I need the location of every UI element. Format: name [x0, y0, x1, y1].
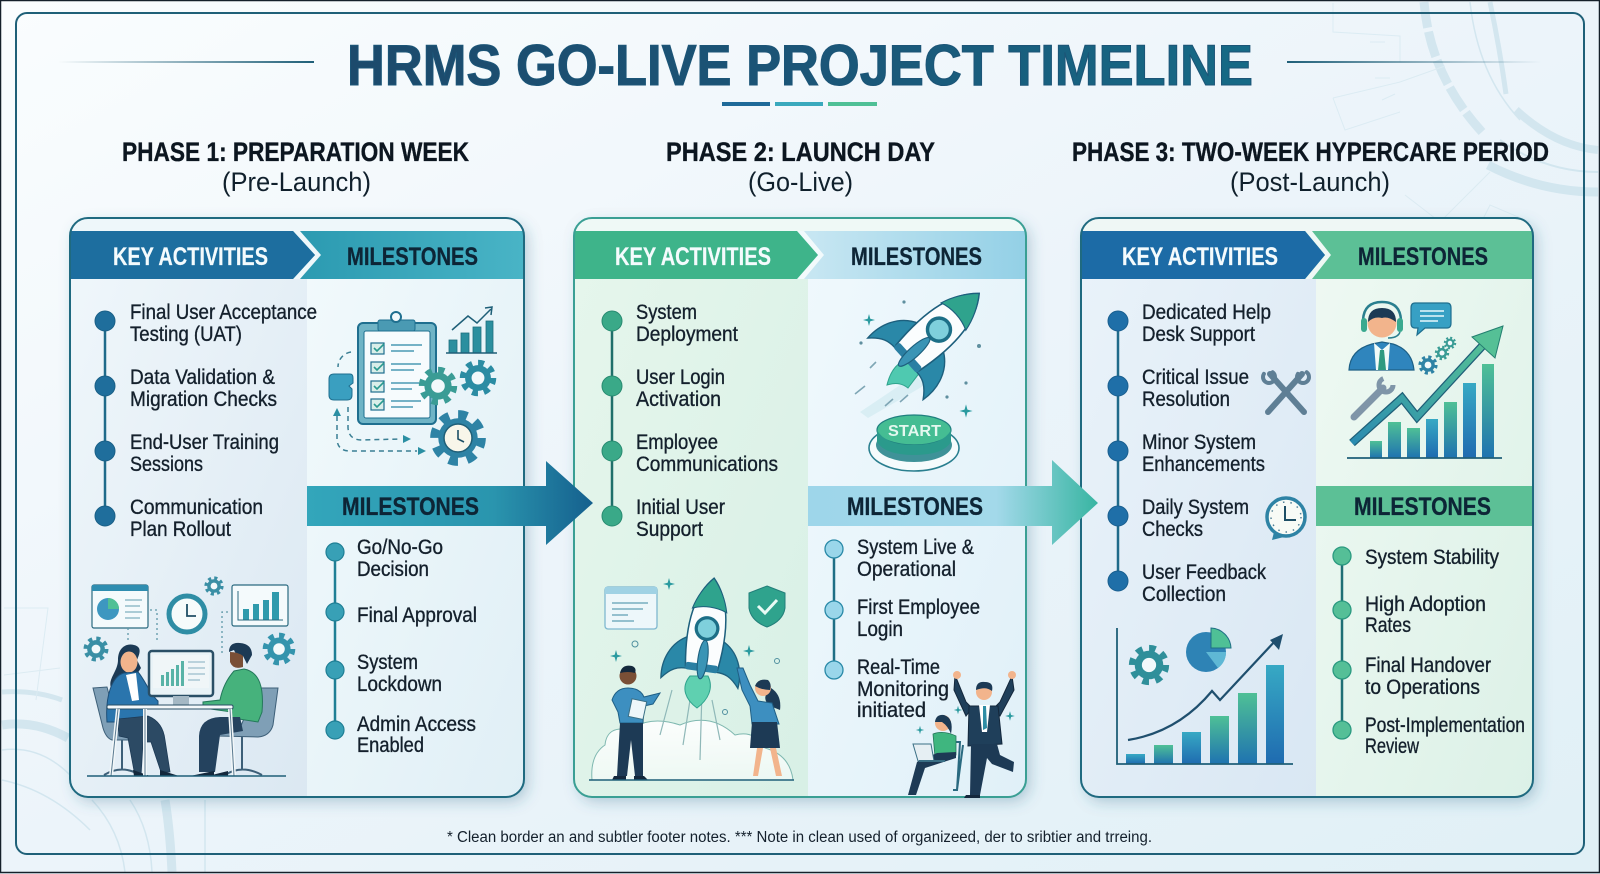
phase 3 activities timeline [1108, 301, 1271, 606]
phase 2 milestones timeline [825, 536, 980, 722]
panel: phase 1 [70, 218, 524, 797]
phase 1 milestones timeline: Lockdown [357, 673, 442, 696]
phase 2 activities timeline: Deployment [636, 323, 738, 346]
phase 2 milestones timeline: Operational [857, 558, 956, 581]
phase 2 heading: PHASE 2: LAUNCH DAY [666, 137, 935, 167]
illustration: team launching rocket [589, 573, 794, 780]
phase 3 milestones timeline: to Operations [1365, 676, 1480, 699]
panel: phase 2 [574, 218, 1026, 798]
icon: rocket launching over start button: START [888, 423, 941, 440]
arrow: phase 2 to phase 3 with milestones band [808, 460, 1098, 545]
title rule left [58, 61, 314, 63]
icon: crossed wrenches [1263, 371, 1309, 412]
phase 3 activities timeline: Checks [1142, 518, 1203, 541]
phase 1 activities timeline [95, 301, 317, 541]
phase 1 milestones timeline: System [357, 651, 418, 674]
phase 2 milestones timeline: First Employee [857, 596, 980, 619]
phase 3 activities timeline: Daily System [1142, 496, 1249, 519]
arrow: phase 2 to phase 3 with milestones band: MILESTONES [847, 493, 983, 521]
phase 1 heading: (Pre-Launch) [222, 167, 371, 197]
phase 3 milestones timeline: Final Handover [1365, 654, 1491, 677]
icon: support agent and growth chart [1347, 302, 1503, 458]
phase 3 milestones timeline: High Adoption [1365, 593, 1486, 616]
title accent bars [722, 102, 877, 106]
phase 3 activities timeline: Collection [1142, 583, 1226, 606]
phase 3 milestones timeline: Review [1365, 735, 1420, 758]
phase 3 activities timeline: Critical Issue [1142, 366, 1249, 389]
phase 3 milestones timeline: Rates [1365, 614, 1411, 637]
phase 2 activities timeline: Initial User [636, 496, 725, 519]
phase 1 activities timeline: Migration Checks [130, 388, 277, 411]
phase 1 milestones timeline: Admin Access [357, 713, 476, 736]
phase 3 activities timeline: User Feedback [1142, 561, 1266, 584]
phase 1 activities timeline: Plan Rollout [130, 518, 231, 541]
phase 2 activities timeline: Employee [636, 431, 718, 454]
footer note: * Clean border an and subtler footer notes. *** Note in clean used of organizeed, der to sribtier and trreing. [447, 829, 1152, 846]
phase 3 activities timeline: Resolution [1142, 388, 1230, 411]
phase 3 heading: (Post-Launch) [1230, 167, 1390, 197]
title rule right [1287, 61, 1541, 63]
icon: rocket launching over start button [855, 262, 1007, 471]
arrow: phase 1 to phase 2 with milestones band [307, 461, 593, 545]
phase 3 milestones timeline: System Stability [1365, 546, 1499, 569]
phase 1 heading: PHASE 1: PREPARATION WEEK [122, 137, 469, 167]
phase 2 milestones header: MILESTONES [851, 243, 982, 271]
phase 3 milestones timeline: Post-Implementation [1365, 714, 1525, 737]
phase 1 heading [122, 137, 469, 197]
phase 2 activities timeline: Support [636, 518, 703, 541]
phase 2 milestones timeline: Login [857, 618, 903, 641]
phase 1 key activities header: KEY ACTIVITIES [113, 243, 268, 271]
phase 1 activities timeline: Data Validation & [130, 366, 275, 389]
phase 2 milestones timeline: Real-Time [857, 656, 940, 679]
phase 3 key activities header: KEY ACTIVITIES [1122, 243, 1278, 271]
phase 2 activities timeline: Communications [636, 453, 778, 476]
phase 2 milestones timeline: Monitoring [857, 678, 949, 701]
phase 2 activities timeline: User Login [636, 366, 725, 389]
phase 2 milestones timeline: System Live & [857, 536, 974, 559]
phase 1 activities timeline: Testing (UAT) [130, 323, 242, 346]
phase 1 activities timeline: Communication [130, 496, 263, 519]
icon: clipboard checklist with gears and chart [329, 307, 497, 461]
arrow: phase 1 to phase 2 with milestones band: MILESTONES [342, 493, 479, 521]
phase 2 heading: (Go-Live) [748, 167, 853, 197]
phase 2 activities timeline [602, 301, 778, 541]
phase 3 activities timeline: Dedicated Help [1142, 301, 1271, 324]
phase 3 milestones timeline [1333, 546, 1525, 758]
phase 2 activities timeline: Activation [636, 388, 721, 411]
phase 1 milestones header: MILESTONES [347, 243, 478, 271]
illustration: two colleagues at a desk with dashboards [86, 578, 293, 776]
phase 2 activities timeline: System [636, 301, 697, 324]
phase 1 milestones timeline: Go/No-Go [357, 536, 443, 559]
phase 3 milestones band [1316, 486, 1533, 526]
phase 2 heading [666, 137, 935, 197]
phase 1 milestones timeline: Final Approval [357, 604, 477, 627]
phase 1 activities timeline: Sessions [130, 453, 203, 476]
phase 1 milestones timeline [326, 536, 477, 757]
phase 3 activities timeline: Enhancements [1142, 453, 1265, 476]
phase 1 activities timeline: Final User Acceptance [130, 301, 317, 324]
panel: phase 3 [1081, 218, 1533, 797]
title: HRMS GO-LIVE PROJECT TIMELINE [347, 34, 1253, 98]
phase 1 milestones timeline: Enabled [357, 734, 424, 757]
phase 1 activities timeline: End-User Training [130, 431, 279, 454]
phase 3 heading [1072, 137, 1549, 197]
phase 2 key activities header: KEY ACTIVITIES [615, 243, 771, 271]
phase 3 activities timeline: Minor System [1142, 431, 1256, 454]
phase 3 milestones band label: MILESTONES [1354, 493, 1491, 521]
icon: clock with speech tail [1267, 498, 1305, 540]
phase 1 milestones timeline: Decision [357, 558, 429, 581]
phase 3 milestones header: MILESTONES [1358, 243, 1488, 271]
illustration: celebrating employees [908, 671, 1016, 798]
phase 3 activities timeline: Desk Support [1142, 323, 1255, 346]
phase 2 milestones timeline: initiated [857, 699, 926, 722]
chart: growth bars with gear and pie [1117, 628, 1293, 764]
